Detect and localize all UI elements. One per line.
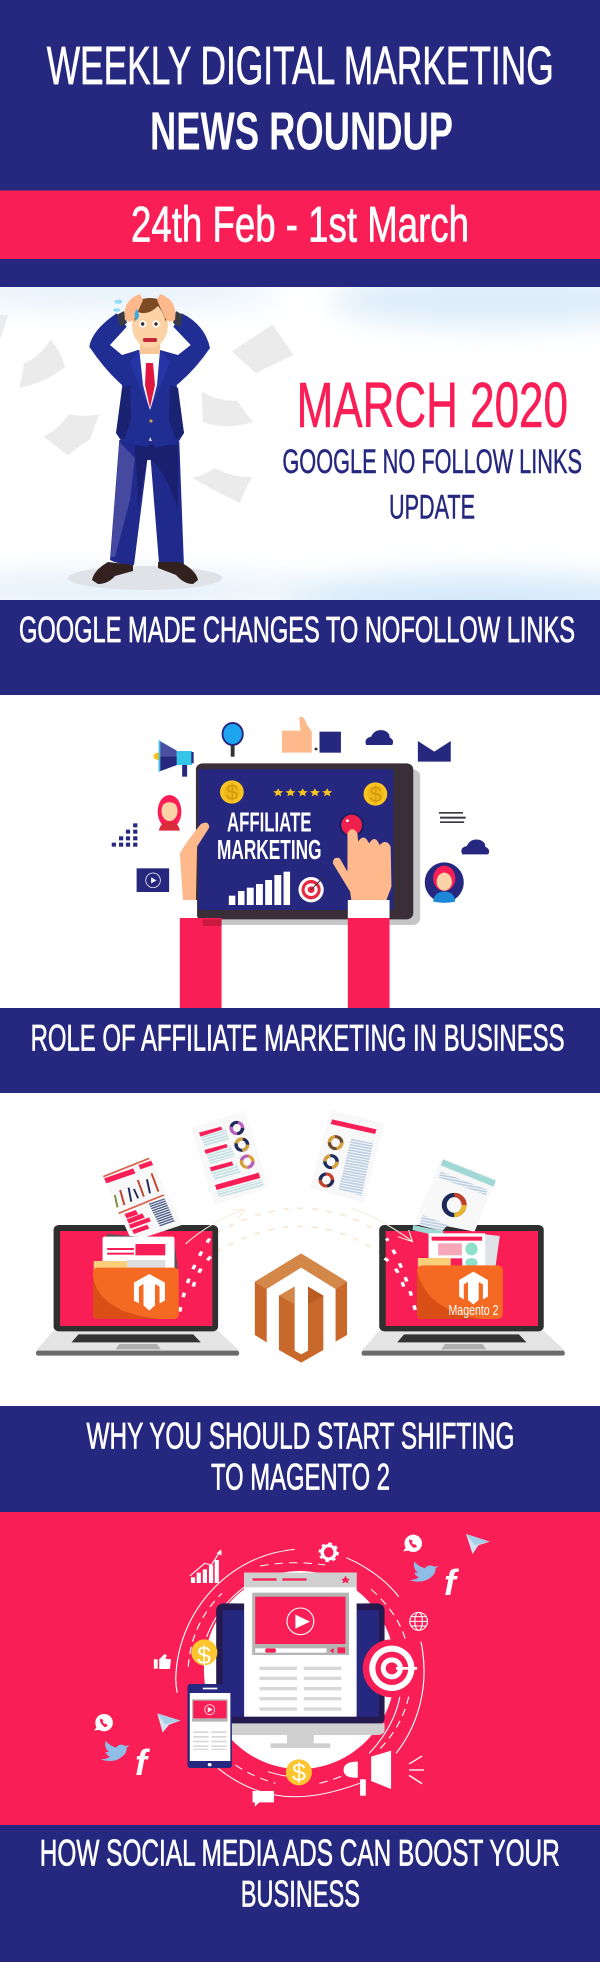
tablet xyxy=(196,763,420,925)
laptop: left xyxy=(36,1225,239,1356)
icon: thumbs up xyxy=(282,717,341,753)
panel: google nofollow hero xyxy=(0,287,600,600)
social f glyphs and dollar signs: f xyxy=(135,1742,150,1783)
paper with bar chart xyxy=(103,1158,182,1242)
folder: right xyxy=(412,1225,503,1319)
social f glyphs and dollar signs: $ xyxy=(197,1642,211,1670)
icon: avatar xyxy=(425,862,464,903)
coin dollar signs xyxy=(226,780,382,807)
icon: red button xyxy=(339,813,364,837)
laptop: right xyxy=(362,1225,565,1356)
caption: magento: TO MAGENTO 2 xyxy=(211,1457,390,1498)
icon: dot grid xyxy=(112,823,137,847)
tablet heading xyxy=(217,806,322,865)
panel: magento shift xyxy=(0,1093,600,1406)
icon: gear xyxy=(320,1544,337,1561)
paper with rings, right xyxy=(310,1110,385,1203)
icon: mail xyxy=(418,741,451,762)
flying papers xyxy=(0,315,293,503)
social icons, upper right xyxy=(403,1534,490,1582)
icon: coins xyxy=(220,780,387,806)
magento logo xyxy=(255,1253,347,1363)
paper with rings, left xyxy=(191,1111,269,1205)
icon: rating stars xyxy=(273,788,332,796)
icon: megaphone xyxy=(153,740,194,777)
tablet heading: AFFILIATE xyxy=(227,806,312,837)
icon: chat bubble xyxy=(253,1791,274,1807)
caption: social media: BUSINESS xyxy=(241,1874,360,1915)
coin dollar signs: $ xyxy=(370,782,382,807)
icon: magnifier xyxy=(222,722,244,757)
title xyxy=(47,36,554,162)
illustration: worried man xyxy=(68,294,222,590)
folder: left xyxy=(93,1234,179,1319)
dashed arcs and arrows xyxy=(216,1208,381,1253)
icon: target xyxy=(363,1639,421,1697)
head xyxy=(140,338,160,354)
icon: cloud xyxy=(366,730,393,745)
trousers xyxy=(110,440,184,567)
illustration: tablet and hands xyxy=(112,717,489,1008)
shoes xyxy=(92,562,133,584)
left hand and arm xyxy=(180,823,222,1008)
icon: growth chart xyxy=(190,1549,222,1583)
panel: affiliate marketing xyxy=(0,695,600,1008)
hero subhead xyxy=(282,443,582,526)
social f glyphs and dollar signs: $ xyxy=(292,1759,306,1787)
icon: coins xyxy=(191,1639,312,1785)
arrows xyxy=(186,1208,412,1244)
icon: thumbs up xyxy=(154,1654,171,1669)
date banner: 24th Feb - 1st March xyxy=(131,196,469,252)
jacket and arms xyxy=(89,313,210,448)
title: NEWS ROUNDUP xyxy=(150,102,453,162)
icon: woman avatar xyxy=(158,795,181,831)
caption: magento xyxy=(86,1416,514,1498)
icon: globe xyxy=(410,1612,427,1630)
phone xyxy=(187,1684,232,1768)
icon: target xyxy=(298,877,324,902)
white circle xyxy=(204,1571,395,1769)
social icons, lower left xyxy=(94,1713,181,1761)
paper with donut chart xyxy=(415,1158,497,1232)
panel: social media ads xyxy=(0,1512,600,1825)
icon: text lines xyxy=(439,812,466,823)
hero sky background xyxy=(0,287,600,600)
tablet heading: MARKETING xyxy=(217,834,322,865)
right hand and arm xyxy=(333,829,391,1008)
hero subhead: UPDATE xyxy=(389,488,475,526)
date banner xyxy=(0,190,600,259)
bar chart xyxy=(229,872,290,905)
icon: megaphone xyxy=(344,1751,424,1796)
coin dollar signs: $ xyxy=(226,780,238,805)
social f glyphs and dollar signs xyxy=(135,1562,459,1787)
browser page with video xyxy=(236,1573,364,1717)
social f glyphs and dollar signs: f xyxy=(444,1562,459,1603)
white transfer dashes on screens xyxy=(180,1232,415,1312)
icon: video xyxy=(137,868,169,892)
caption: social media xyxy=(40,1833,560,1915)
orbit lines xyxy=(176,1549,424,1797)
monitor xyxy=(216,1603,385,1748)
icon: cloud xyxy=(461,839,489,854)
magento 2 label: Magento 2 xyxy=(448,1303,498,1319)
